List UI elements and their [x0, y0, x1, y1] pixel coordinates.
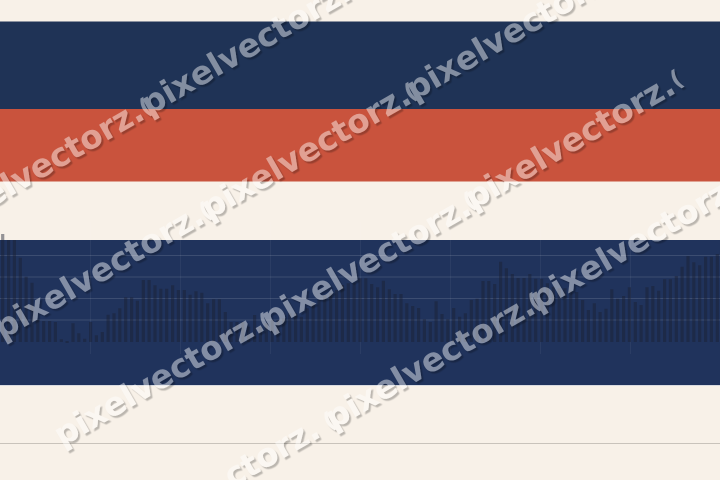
watermark: pixelvectorz.	[458, 66, 682, 217]
bar chart	[3, 234, 717, 343]
watermark: (	[255, 309, 277, 336]
watermark: (	[459, 188, 481, 215]
footer rule	[0, 443, 720, 444]
watermark: pixelvectorz.	[318, 286, 542, 437]
watermark: (	[135, 94, 157, 121]
red band	[0, 109, 720, 182]
watermark: (	[524, 289, 546, 316]
watermark: (	[666, 66, 688, 93]
navy header band	[0, 22, 720, 109]
watermark: (	[195, 198, 217, 225]
watermark: pixelvectorz.	[194, 76, 418, 227]
watermark: (	[319, 408, 341, 435]
watermark: (	[400, 79, 422, 106]
watermark: pixelvectorz.	[47, 303, 271, 454]
watermark: pixelvectorz.	[254, 187, 478, 338]
chart panel	[0, 222, 720, 386]
